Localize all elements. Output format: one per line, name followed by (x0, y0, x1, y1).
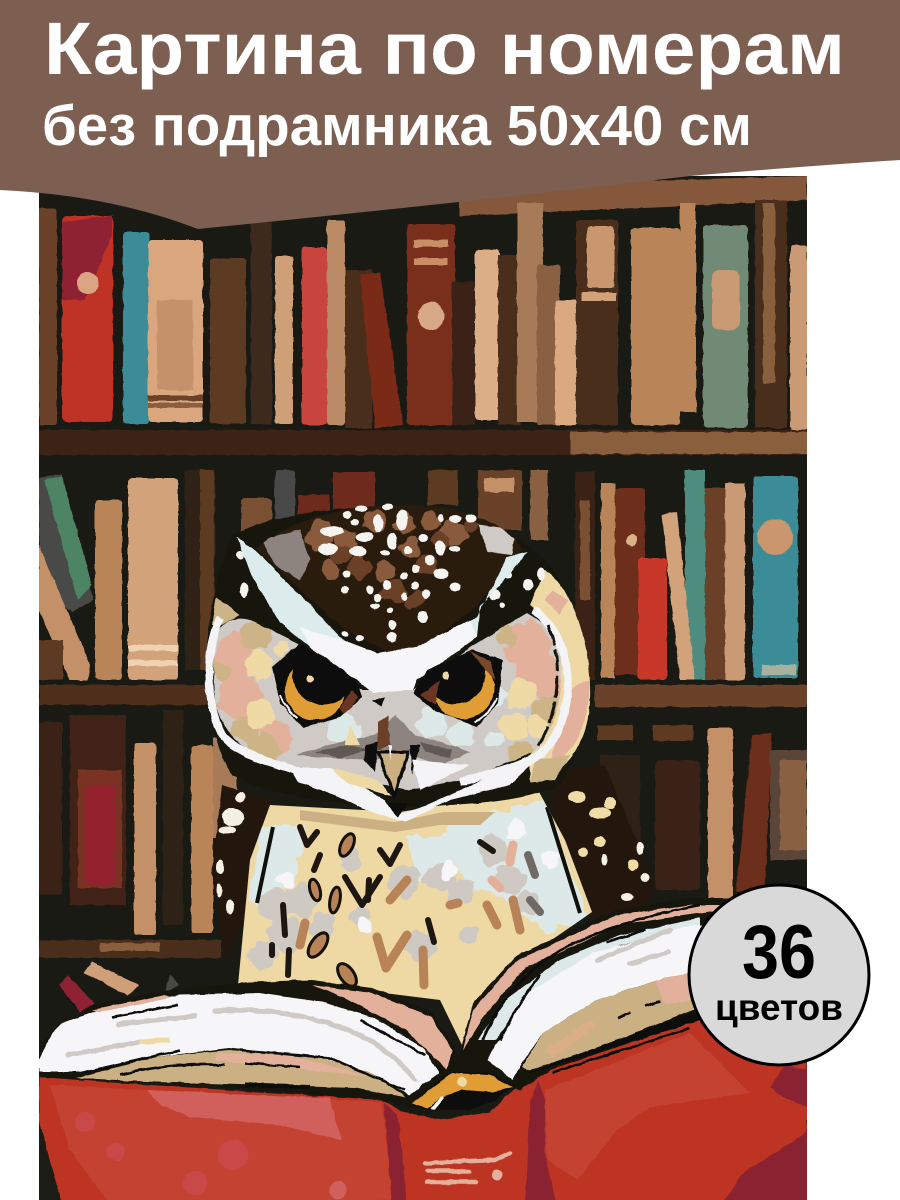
outlined brown feathers (306, 832, 358, 986)
chest side outlines (257, 807, 580, 913)
books: bottom shelf (39, 710, 807, 1012)
face rim dark line (537, 625, 557, 748)
owl wings (212, 765, 655, 960)
chest top band (300, 810, 495, 832)
crown white spots (236, 504, 545, 642)
face disc (213, 613, 561, 790)
header banner (0, 0, 900, 229)
title: Картина по номерам (44, 7, 845, 90)
badge number: 36 (742, 910, 816, 995)
head silhouette (206, 508, 587, 806)
outer cream plumage (530, 570, 590, 782)
owl (206, 504, 655, 1055)
left eye (272, 643, 362, 728)
owl head (206, 504, 590, 822)
painting: owl reading in a library (39, 176, 808, 1200)
chest mottling (248, 800, 590, 969)
nose markings (364, 698, 420, 775)
beak (378, 752, 408, 796)
chest feather marks (272, 827, 540, 985)
spine lines (425, 1153, 510, 1182)
right pages (456, 898, 728, 1090)
book cover (39, 1020, 807, 1200)
badge label: цветов (715, 987, 843, 1028)
bookshelf structure (39, 176, 807, 958)
subtitle: без подрамника 50х40 см (42, 94, 752, 158)
right eye (413, 642, 503, 727)
painting background (39, 176, 807, 1200)
owl body (238, 792, 592, 1045)
bib feathers (293, 762, 534, 822)
brows (237, 537, 527, 693)
books: top shelf (39, 200, 807, 430)
open red book (39, 898, 808, 1200)
facial disc colour patches (211, 619, 566, 769)
book headband (412, 1072, 515, 1110)
face white rim (209, 610, 568, 782)
badge: 36 colours (689, 885, 869, 1065)
crown (255, 505, 522, 655)
left pages (39, 980, 462, 1108)
crown mottling (262, 509, 515, 610)
badge circle (689, 885, 869, 1065)
dark grey facial bars (295, 715, 470, 765)
books: middle shelf (39, 470, 798, 680)
